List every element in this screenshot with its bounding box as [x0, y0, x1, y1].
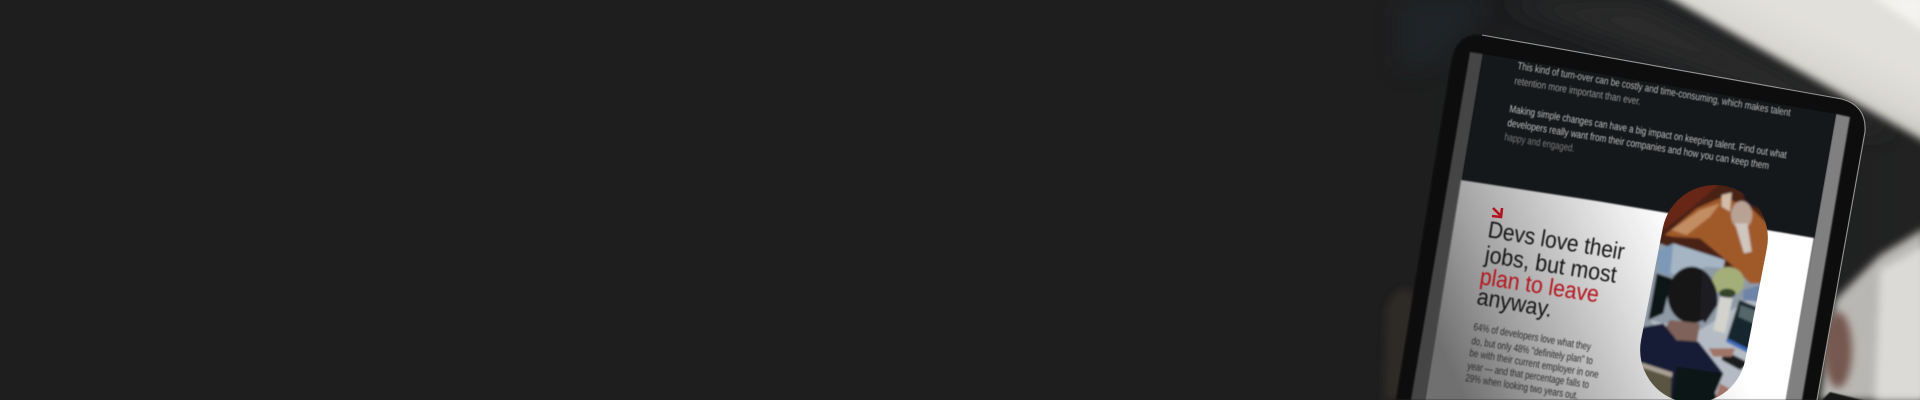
grey laptop back [1670, 242, 1727, 276]
vase [1713, 297, 1733, 333]
intro text block: happy and engaged. [1503, 131, 1576, 155]
body paragraph: year — and that percentage falls to [1467, 360, 1590, 391]
intro text block: retention more important than ever. [1514, 75, 1642, 108]
heading: Devs love their [1486, 216, 1627, 265]
icon: red arrow [1492, 208, 1502, 217]
man with headphones [1668, 267, 1716, 323]
white document panel [1425, 180, 1814, 400]
man in orange shirt [1665, 197, 1777, 283]
intro text block: This kind of turn-over can be costly and time-consuming, which makes talent [1516, 60, 1792, 119]
hero banner [1384, 0, 1920, 400]
photo: developers at desks [1640, 185, 1768, 400]
body paragraph: be with their current employer in one [1468, 347, 1600, 381]
heading: anyway. [1475, 283, 1554, 322]
right laptop [1726, 299, 1756, 350]
heading [1475, 216, 1627, 322]
body paragraph [1465, 321, 1600, 400]
tablet edge highlight [1482, 35, 1865, 400]
photo backdrop [1644, 242, 1760, 331]
intro text block: developers really want from their companies and how you can keep them [1507, 117, 1770, 172]
tablet body [1396, 35, 1865, 400]
intro text block: Making simple changes can have a big impact on keeping talent. Find out what [1509, 103, 1788, 161]
tablet [1396, 35, 1865, 400]
blurred room backdrop [1380, 0, 1920, 400]
dark screen panel [1425, 54, 1836, 400]
heading: plan to leave [1478, 263, 1601, 307]
left monitor [1648, 273, 1672, 320]
screen right bar [1786, 114, 1850, 400]
screen left bar [1411, 52, 1483, 400]
navy t-shirt [1637, 323, 1727, 400]
body paragraph: 64% of developers love what they [1472, 321, 1592, 353]
body paragraph: do, but only 48% "definitely plan" to [1471, 335, 1594, 367]
desk surface [1650, 300, 1756, 396]
hand holding tablet [1384, 289, 1418, 400]
plant [1712, 267, 1744, 296]
heading: jobs, but most [1482, 241, 1619, 288]
chair [1644, 368, 1674, 398]
intro text block [1503, 60, 1792, 172]
